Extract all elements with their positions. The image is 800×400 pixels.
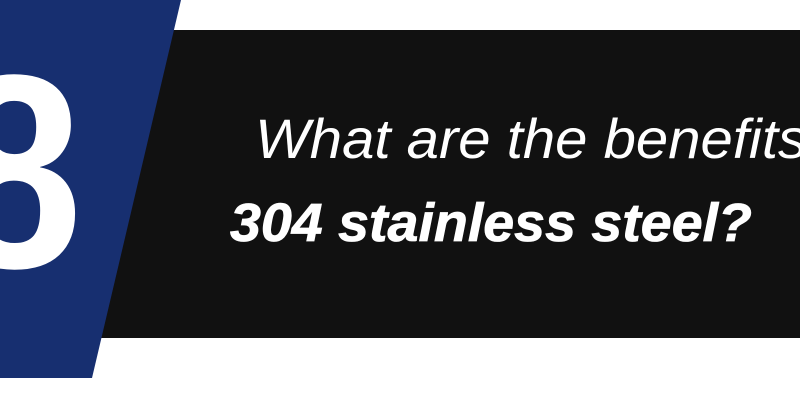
panel: blue number slanted block [0,0,181,378]
question line 1: What are the benefits [255,107,800,170]
question line 2: 304 stainless steel? [230,193,752,253]
panel: black question background [90,30,800,338]
